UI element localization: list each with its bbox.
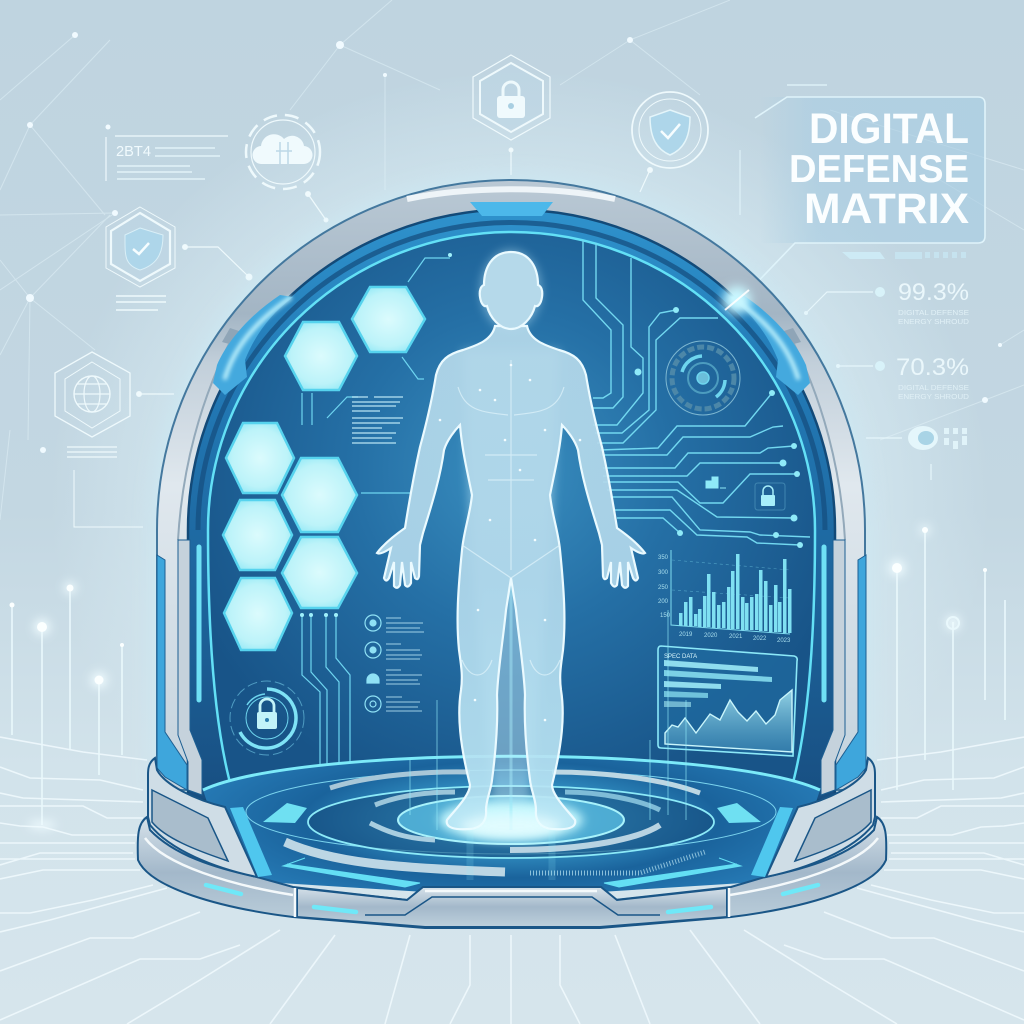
- cyan strips: [230, 807, 272, 877]
- stat: 70.3%: 70.3%: [896, 354, 969, 381]
- cyan arc highlights: [225, 298, 290, 378]
- hexagon array: [223, 287, 425, 650]
- title text: DEFENSE: [789, 148, 969, 191]
- left side blue strip: [157, 555, 187, 790]
- rim joint left: [222, 328, 248, 347]
- bar chart: 2019: [679, 632, 693, 638]
- side rim tab right: [730, 295, 810, 395]
- centre plate: [297, 887, 727, 927]
- circuits near hexagons: [300, 253, 452, 800]
- lock ring: [230, 681, 304, 755]
- stat: 99.3%: [804, 279, 969, 326]
- HUD target: [666, 341, 740, 415]
- light flare: [723, 286, 751, 314]
- stat: 99.3%: ENERGY SHROUD: [898, 319, 969, 326]
- dome: [157, 180, 866, 800]
- data ticks: [530, 852, 705, 873]
- title text: MATRIX: [804, 185, 969, 233]
- floor arcs: [285, 772, 700, 872]
- top white lip: [407, 189, 615, 199]
- dashboard panel: [658, 646, 797, 756]
- bar chart: 250: [658, 585, 669, 591]
- left info block: 2BT4: 2BT4: [116, 144, 151, 160]
- stat: 70.3%: ENERGY SHROUD: [898, 394, 969, 401]
- floor ring inner: [398, 796, 624, 844]
- stat: 70.3%: DIGITAL DEFENSE: [898, 385, 969, 392]
- bar chart: 2020: [704, 633, 718, 639]
- floor cyan blocks: [263, 803, 307, 823]
- left inner silver strip: [178, 540, 202, 795]
- feet glow: [461, 814, 561, 838]
- human figure: [377, 250, 645, 829]
- floor circuit lines: [0, 737, 1024, 1024]
- bar chart: 350: [658, 555, 669, 561]
- light beams: [410, 580, 686, 880]
- bar chart: 150: [660, 613, 671, 619]
- side light bars: [199, 547, 824, 700]
- side double lines: [178, 338, 845, 540]
- icon: shield hexagon: [106, 207, 252, 310]
- rim highlight: [145, 838, 878, 895]
- bar chart: [658, 550, 792, 644]
- icon: globe hexagon: [55, 352, 174, 527]
- outer floor cyan line: [203, 756, 820, 790]
- stat: 99.3%: DIGITAL DEFENSE: [898, 310, 969, 317]
- bar chart: 2021: [729, 634, 743, 640]
- right inner silver strip: [821, 540, 845, 795]
- upper right collar: [766, 758, 875, 877]
- title text: [789, 105, 969, 233]
- bar chart: 2023: [777, 638, 791, 644]
- dark band arc: [198, 223, 825, 530]
- dome silver rim: [157, 180, 865, 790]
- side rim tab left: [213, 295, 293, 395]
- title panel: [740, 85, 985, 295]
- collar insets: [152, 790, 228, 861]
- dome glass: [208, 232, 815, 790]
- top lit segment: [470, 202, 553, 216]
- small text block: [352, 397, 403, 443]
- bar chart: 2022: [753, 636, 767, 642]
- icon: check shield circle: [632, 92, 708, 192]
- title text: DIGITAL: [809, 105, 969, 153]
- head: [480, 252, 542, 329]
- right side blue strip: [836, 555, 866, 790]
- icon: top lock hexagon: [473, 55, 550, 175]
- background light posts: [10, 525, 1005, 829]
- small data glyph: [866, 426, 967, 480]
- muscle shading: [458, 360, 564, 675]
- lower tier: [138, 817, 886, 928]
- stat: 99.3%: 99.3%: [898, 279, 969, 306]
- dashboard panel: SPEC DATA: [664, 654, 697, 660]
- floor ring outer: [308, 786, 714, 858]
- base platform: [138, 758, 886, 928]
- base lights: [206, 885, 818, 912]
- body: [377, 326, 645, 829]
- bar chart: 300: [658, 570, 669, 576]
- glow around dome: [157, 180, 865, 790]
- stat: 70.3%: [836, 354, 969, 401]
- left info block: 2BT4: [106, 124, 228, 181]
- upper left collar: [148, 758, 257, 877]
- background network lines: [0, 0, 1024, 520]
- platform floor: [203, 756, 820, 892]
- rim joint right: [775, 328, 801, 347]
- floor cyan bottom strokes: [283, 858, 420, 887]
- icon list: [365, 615, 424, 712]
- icon: cloud: [246, 115, 328, 222]
- right circuit board: [583, 240, 810, 548]
- background glow dots: [26, 32, 1002, 453]
- dome inner blue band: [188, 210, 835, 800]
- bar chart: 200: [658, 599, 669, 605]
